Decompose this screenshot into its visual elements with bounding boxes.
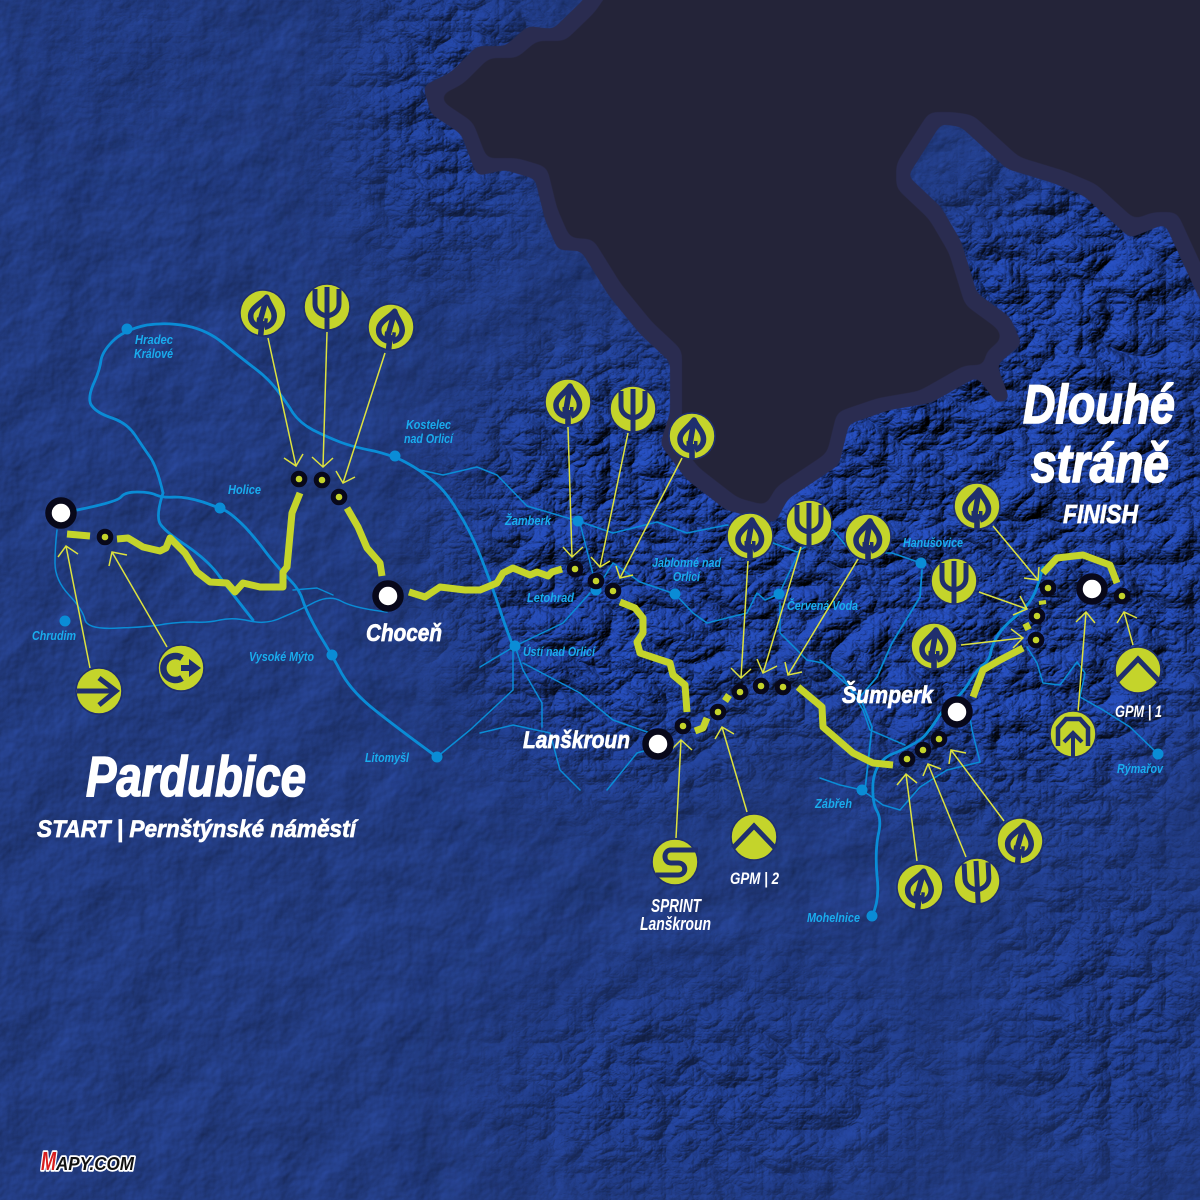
icon: feed zone flames and forks	[238, 284, 1045, 912]
race route	[67, 493, 1117, 765]
icon: GPM 2	[731, 814, 777, 860]
icon: finish tunnel	[1050, 711, 1096, 757]
stage towns (white markers)	[48, 500, 1104, 756]
town labels: Králové	[134, 346, 173, 361]
pointer arrows	[58, 332, 1137, 861]
road network	[55, 324, 1158, 916]
icon: start arrow	[76, 668, 122, 714]
logo: Mapy.com: M	[41, 1146, 57, 1176]
town labels: Jablonné nad	[652, 555, 722, 570]
dark area outside the region	[423, 0, 1200, 523]
town labels	[32, 332, 1164, 925]
icon: neutral start C arrow	[158, 645, 204, 691]
subtitle: finish: FINISH	[1063, 499, 1139, 529]
town labels: Ústí nad Orlicí	[523, 644, 596, 659]
GPM 1 label: GPM | 1	[1115, 702, 1162, 721]
town labels: Rýmařov	[1117, 761, 1164, 776]
town labels: Mohelnice	[807, 910, 860, 925]
logo: Mapy.com	[41, 1146, 135, 1176]
logo: Mapy.com: APY.COM	[55, 1154, 135, 1174]
title: Dlouhé stráně	[1023, 373, 1175, 494]
town markers (blue nodes)	[60, 324, 1164, 922]
town labels: Kostelec	[406, 417, 452, 432]
icon: GPM 1	[1115, 647, 1161, 693]
stage town labels: Šumperk	[842, 681, 934, 709]
town labels: Hanušovice	[903, 535, 963, 550]
route stops	[99, 473, 1128, 765]
icon: sprint	[652, 839, 698, 885]
town labels: Orlicí	[673, 569, 701, 584]
stage town labels	[366, 620, 934, 754]
subtitle: start: START | Pernštýnské náměstí	[37, 816, 359, 843]
town labels: Hradec	[135, 332, 174, 347]
town labels: Žamberk	[504, 513, 552, 528]
title: Dlouhé stráně: stráně	[1031, 432, 1169, 494]
title: Pardubice: Pardubice	[86, 745, 306, 809]
sprint label: SPRINT	[651, 896, 703, 916]
town labels: Holice	[228, 482, 261, 497]
town labels: nad Orlicí	[404, 431, 454, 446]
sprint label: Lanškroun	[640, 914, 711, 934]
GPM 2 label: GPM | 2	[730, 869, 779, 888]
stage town labels: Lanškroun	[523, 727, 630, 754]
town labels: Vysoké Mýto	[249, 649, 314, 664]
sprint label	[640, 896, 711, 934]
town labels: Zábřeh	[814, 796, 852, 811]
stage town labels: Choceň	[366, 620, 442, 647]
town labels: Litomyšl	[365, 750, 409, 765]
town labels: Červená Voda	[787, 598, 858, 613]
town labels: Letohrad	[527, 590, 575, 605]
town labels: Chrudim	[32, 628, 76, 643]
